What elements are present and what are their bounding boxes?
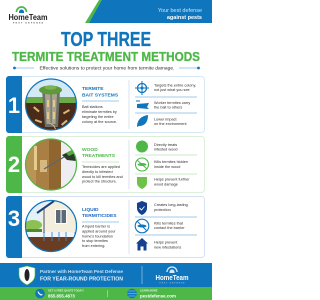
- text: phone: 855.855.4873: [48, 294, 75, 298]
- benefit: long-lasting protection: protection: [154, 208, 171, 212]
- number tab 2: 2: [8, 152, 20, 177]
- benefit: directly treats: Directly treats: [154, 143, 177, 147]
- text: bait systems: Bait stations: [82, 105, 103, 109]
- logo: HomeTeam: [8, 7, 48, 25]
- subtitle: Effective solutions to protect your home from termite damage.: [40, 65, 174, 70]
- tagline: [158, 8, 202, 21]
- header banner: [85, 0, 212, 23]
- illustration: bait station: [25, 78, 77, 131]
- benefit: home infestations: new infestations: [154, 246, 181, 250]
- number tab 3: 3: [8, 206, 20, 231]
- icon: termite shield: [19, 266, 35, 285]
- text: liquid termiticides: home's foundation: [82, 234, 113, 238]
- logo: footer: PEST DEFENSE: [160, 282, 185, 284]
- benefit: lower impact: Lower impact: [154, 118, 178, 122]
- text: wood treatments: TREATMENTS: [82, 153, 116, 159]
- number tab 3: [6, 196, 22, 258]
- title: [12, 29, 200, 64]
- text: liquid termiticides: [82, 207, 119, 248]
- logo: footer: [156, 267, 188, 284]
- footer bar: contact: [0, 287, 212, 300]
- text: wood treatments: protect the structure.: [82, 180, 117, 184]
- benefit: prevents wood damage: Helps prevent further: [154, 178, 190, 182]
- footer banner: partner: [0, 263, 212, 287]
- text: liquid termiticides: applied around your: [82, 230, 116, 234]
- text: bait systems: BAIT SYSTEMS: [82, 92, 119, 98]
- logo: footer: HomeTeam: [156, 275, 188, 282]
- text: phone: GET A FREE QUOTE TODAY!: [48, 288, 84, 292]
- text: bait systems: TERMITE: [82, 86, 104, 92]
- benefit: targets colony: Targets the entire colony,: [154, 84, 196, 88]
- text: wood treatments: [82, 147, 123, 184]
- panel: liquid termiticides: [6, 196, 204, 258]
- benefit: directly treats: infested wood: [154, 148, 177, 152]
- text: liquid termiticides: from entering.: [82, 244, 105, 248]
- number tab 2: [6, 136, 22, 193]
- tagline: against pests: [167, 15, 202, 21]
- benefit: home infestations: Helps prevent: [154, 240, 178, 244]
- benefit: lower impact: on the environment: [154, 122, 187, 126]
- benefit: directly treats: [136, 140, 177, 152]
- text: bait systems: eliminate termites by: [82, 110, 117, 114]
- text: liquid termiticides: TERMITICIDES: [82, 213, 117, 219]
- tagline: Your best defense: [158, 8, 202, 14]
- text: liquid termiticides: LIQUID: [82, 207, 99, 213]
- text: partner: FOR YEAR-ROUND PROTECTION: [40, 276, 123, 282]
- title: TOP THREE: [61, 29, 151, 51]
- icon: phone: [35, 289, 45, 298]
- text: bait systems: [82, 86, 119, 124]
- text: bait systems: colony at the source.: [82, 120, 117, 124]
- illustration: house: [24, 200, 77, 253]
- benefit: targets colony: [135, 81, 196, 95]
- text: website: [140, 288, 176, 298]
- benefit: prevents wood damage: [137, 177, 190, 189]
- number tab 1: 1: [8, 93, 20, 118]
- benefit: worker termites: [136, 101, 190, 110]
- text: website: LEARN MORE: [140, 288, 158, 292]
- benefit: kills termites at barrier: [135, 219, 185, 233]
- text: wood treatments: directly to infested: [82, 170, 113, 174]
- benefit: targets colony: not just what you see: [154, 88, 190, 92]
- logo: HomeTeam: PEST DEFENSE: [13, 22, 44, 24]
- panel: wood treatments: [6, 136, 204, 193]
- benefit: kills termites at barrier: Kills termites that: [154, 222, 184, 226]
- text: wood treatments: Termicides are applied: [82, 165, 120, 169]
- text: wood treatments: WOOD: [82, 147, 98, 153]
- benefit: lower impact: [137, 115, 187, 127]
- text: liquid termiticides: A liquid barrier is: [82, 224, 110, 228]
- text: liquid termiticides: to stop termites: [82, 239, 108, 243]
- illustration: wood: [25, 138, 78, 191]
- text: partner: [40, 269, 124, 282]
- benefit: long-lasting protection: Creates long-lasting: [154, 203, 188, 207]
- benefit: worker termites: Worker termites carry: [154, 101, 190, 105]
- benefit: kills hidden termites: inside the wood: [154, 165, 180, 169]
- number tab 1: [6, 76, 22, 133]
- benefit: home infestations: [136, 238, 181, 250]
- text: website: pestdefense.com: [140, 294, 176, 298]
- text: partner: Partner with HomeTeam Pest Defense: [40, 269, 124, 274]
- benefit: kills termites at barrier: contact the barrier: [154, 226, 185, 230]
- icon: globe: [127, 289, 137, 298]
- benefit: worker termites: the bait to others: [154, 106, 182, 110]
- text: phone: [48, 288, 84, 298]
- logo: HomeTeam: HomeTeam: [8, 13, 48, 22]
- benefit: prevents wood damage: wood damage: [154, 182, 178, 186]
- text: bait systems: targeting the entire: [82, 115, 114, 119]
- benefit: long-lasting protection: [137, 201, 188, 215]
- panel: termite bait systems: [6, 76, 204, 133]
- text: wood treatments: wood to kill termites and: [82, 175, 123, 179]
- benefit: kills hidden termites: Kills termites hidden: [154, 160, 188, 164]
- benefit: kills hidden termites: [136, 158, 188, 171]
